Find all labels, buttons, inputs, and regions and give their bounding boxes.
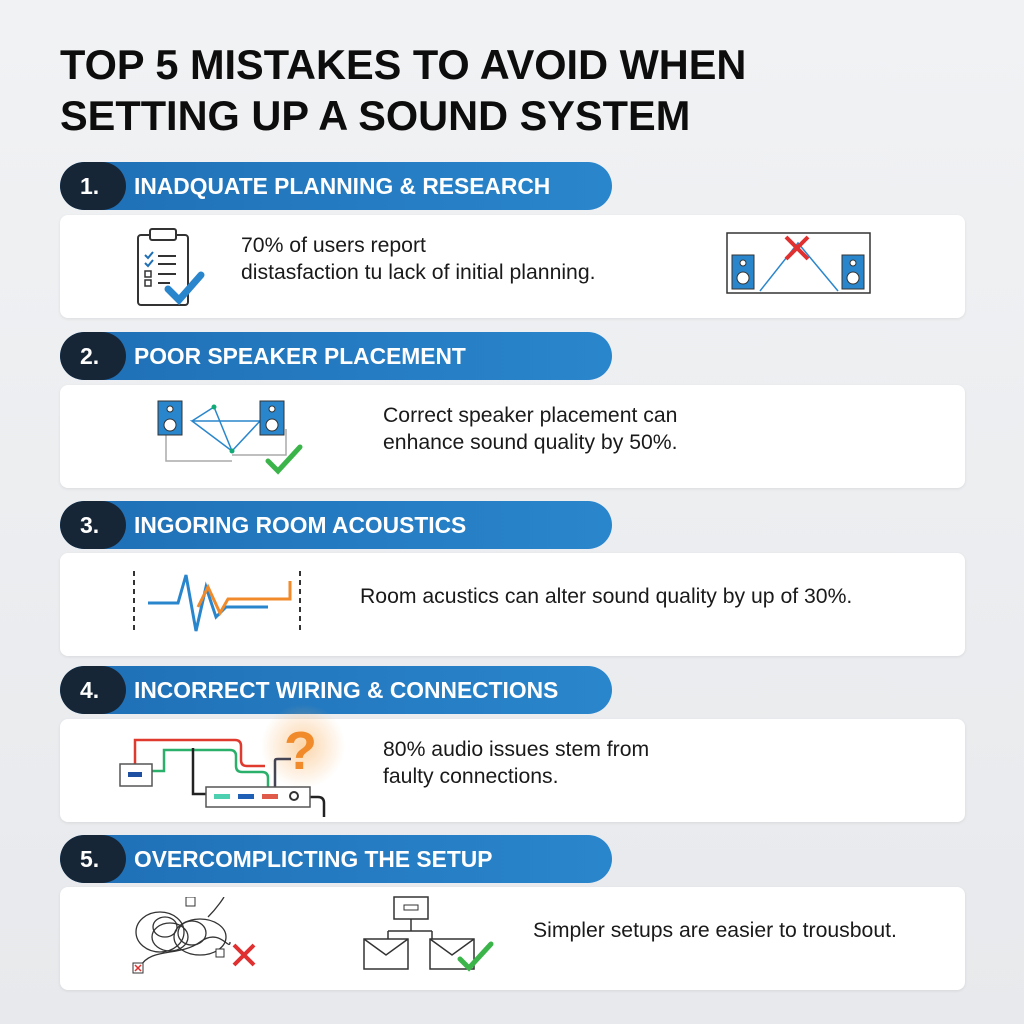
header 4: 4.: [80, 677, 99, 703]
card 2: [60, 385, 965, 488]
header 4: INCORRECT WIRING & CONNECTIONS: [134, 677, 558, 703]
header 2: POOR SPEAKER PLACEMENT: [134, 343, 466, 369]
header 2: 2.: [80, 343, 99, 369]
header 5: [60, 835, 612, 883]
text 1: [241, 234, 596, 284]
text 4: [383, 738, 649, 788]
text 3: Room acustics can alter sound quality by up of 30%.: [360, 585, 852, 608]
header 5: 5.: [80, 846, 99, 872]
icon: wiring with question mark: ?: [284, 721, 317, 781]
header 3: 3.: [80, 512, 99, 538]
text 2: Correct speaker placement can: [383, 404, 677, 427]
text 2: [383, 404, 677, 454]
card 1: [60, 215, 965, 318]
icon: tangled wires: [132, 897, 256, 974]
text 1: distasfaction tu lack of initial planning.: [241, 261, 596, 284]
title: TOP 5 MISTAKES TO AVOID WHEN: [60, 41, 746, 88]
title: [60, 41, 746, 139]
header 1: 1.: [80, 173, 99, 199]
icon: waveform: [133, 571, 301, 632]
header 1: [60, 162, 612, 210]
header 1: INADQUATE PLANNING & RESEARCH: [134, 173, 550, 199]
card 3: [60, 553, 965, 656]
header 3: [60, 501, 612, 549]
header 5: OVERCOMPLICTING THE SETUP: [134, 846, 492, 872]
text 5: Simpler setups are easier to trousbout.: [533, 919, 897, 942]
icon: correct speaker placement: [158, 400, 302, 475]
icon: simple setup: [363, 896, 494, 972]
header 2: [60, 332, 612, 380]
card 5: [60, 887, 965, 990]
text 4: 80% audio issues stem from: [383, 738, 649, 761]
header 4: [60, 666, 612, 714]
icon: bad speaker layout: [726, 232, 871, 294]
header 3: INGORING ROOM ACOUSTICS: [134, 512, 466, 538]
text 1: 70% of users report: [241, 234, 426, 257]
title: SETTING UP A SOUND SYSTEM: [60, 92, 690, 139]
icon: wiring with question mark: [119, 706, 341, 817]
card 4: [60, 719, 965, 822]
text 2: enhance sound quality by 50%.: [383, 431, 677, 454]
text 4: faulty connections.: [383, 765, 558, 788]
icon: clipboard: [137, 228, 204, 306]
